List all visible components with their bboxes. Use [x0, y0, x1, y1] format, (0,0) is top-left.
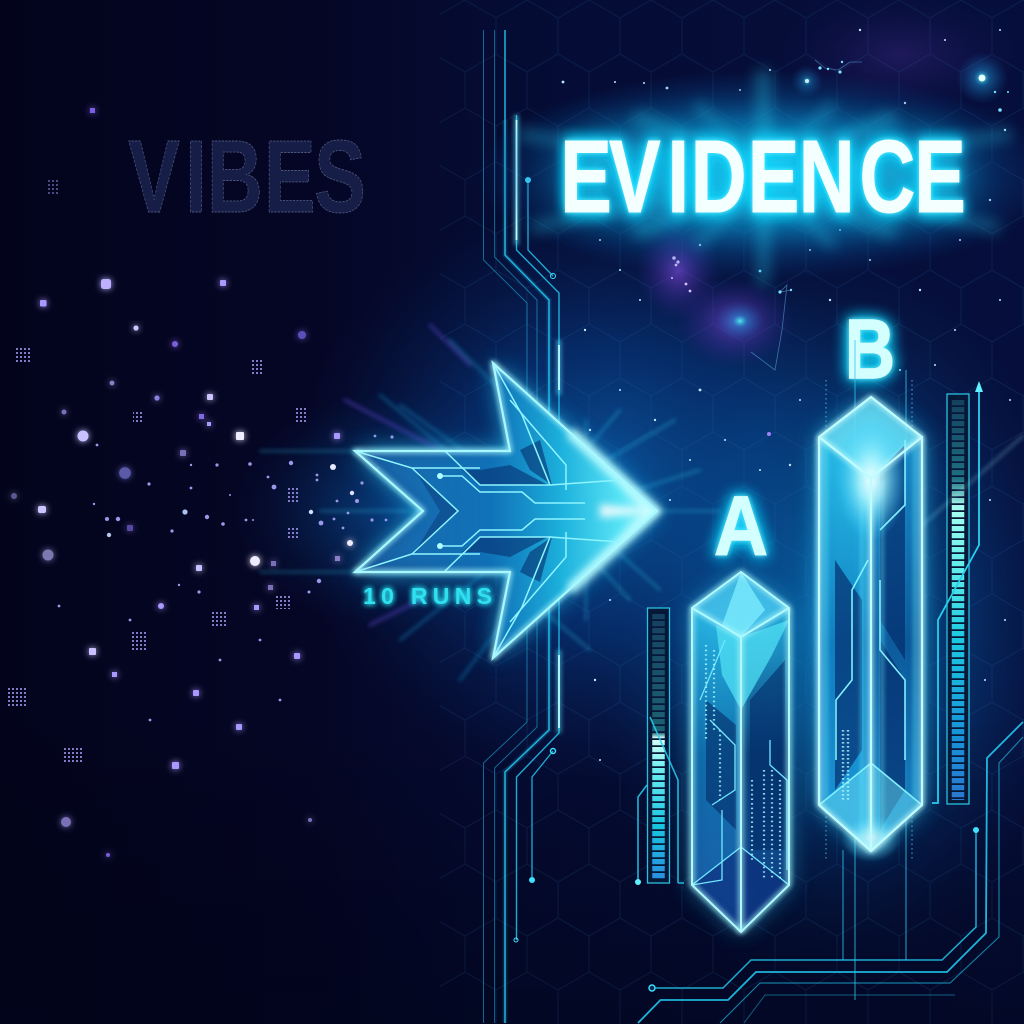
- crystal A glow: [692, 572, 789, 932]
- crystal A circuits: [692, 640, 789, 885]
- crystal B circuits: [819, 440, 922, 805]
- dot-matrix clusters: [8, 180, 306, 764]
- small dots dissolving toward arrow: [58, 435, 394, 721]
- label: 10 RUNS: 10 RUNS: [363, 583, 492, 609]
- label: B: B: [845, 302, 895, 396]
- crystal A top: [692, 572, 789, 637]
- arrow glow halo: [355, 363, 657, 658]
- arrow light rays: [260, 325, 720, 680]
- purple particles: [11, 108, 353, 857]
- EVIDENCE glow and rays: [475, 70, 1024, 285]
- crystal A binary data: [706, 645, 780, 880]
- crystal A right face: [741, 608, 789, 932]
- arrow body: [355, 363, 657, 658]
- arrow bright edges: [570, 432, 655, 590]
- title: VIBES (faded): VIBES: [128, 120, 366, 235]
- arrow bright tip: [600, 504, 657, 518]
- crystal B glow: [819, 397, 922, 851]
- crystal A left face: [692, 608, 741, 932]
- crystal B lower facet: [819, 763, 922, 851]
- arrow outline: [355, 363, 657, 658]
- arrow: [355, 363, 690, 658]
- crystal A: [692, 572, 789, 932]
- arrow center line: [423, 510, 690, 512]
- starfield and nebula: [562, 0, 1020, 761]
- arrow facets: [413, 440, 552, 582]
- crystal B edges: [819, 397, 922, 851]
- crystal B: [819, 397, 922, 862]
- crystal B inner light strips: [826, 440, 915, 840]
- crystal B left face: [819, 437, 871, 851]
- title: EVIDENCE: EVIDENCE: [560, 120, 966, 235]
- crystal B binary data: [843, 730, 848, 800]
- crystal A dark facets: [692, 660, 789, 932]
- crystal B right face: [871, 437, 922, 851]
- label: A: A: [714, 479, 768, 573]
- circuit lines: [484, 30, 1023, 1023]
- crystal B bright core: [835, 418, 907, 542]
- crystal B top: [819, 397, 922, 478]
- crystal B inner dark facets: [835, 445, 905, 830]
- crystal A edges: [692, 572, 789, 932]
- arrow node dots: [437, 473, 443, 549]
- gauge A: [635, 608, 684, 885]
- gauge B: [900, 381, 1024, 804]
- crystal B bottom tip glow: [841, 814, 901, 862]
- arrow inner circuit lines: [355, 363, 620, 658]
- beams behind crystal B: [805, 300, 912, 1000]
- circuit nodes: [514, 177, 979, 991]
- crystal A bright facets: [716, 572, 789, 710]
